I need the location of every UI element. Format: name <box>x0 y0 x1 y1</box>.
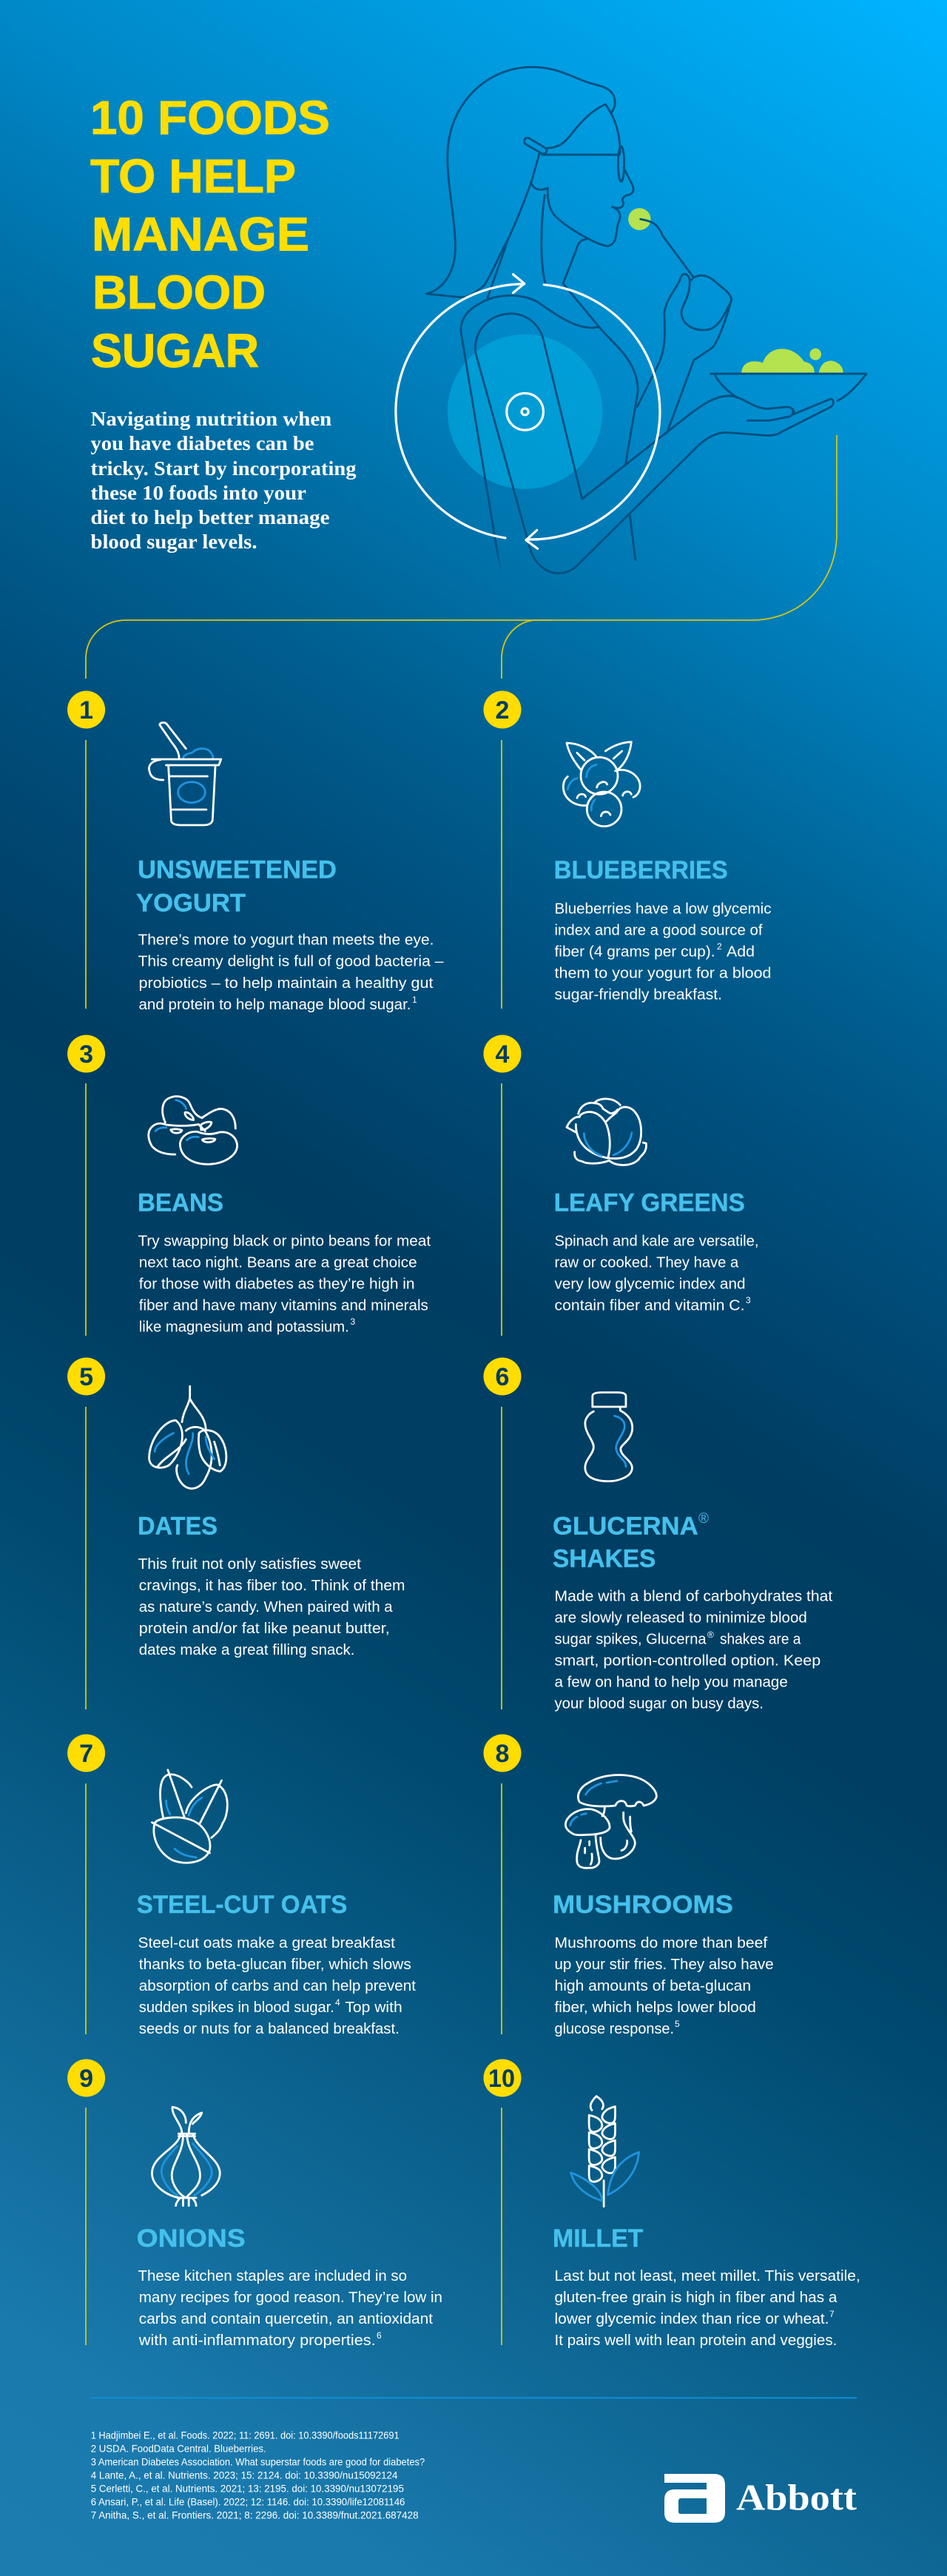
body text: glucerna shakes: smart, portion-controlled option. Keep <box>555 1652 820 1669</box>
body text: onions: These kitchen staples are included in so <box>138 2268 407 2284</box>
body text: onions <box>138 2268 442 2349</box>
number badge 2 <box>484 691 521 728</box>
title: SUGAR <box>91 324 259 377</box>
body text: blueberries: Blueberries have a low glycemic <box>555 901 771 917</box>
body text: leafy greens <box>555 1233 759 1314</box>
body text: yogurt <box>138 932 444 1013</box>
number badge 4 <box>484 1035 521 1073</box>
number badge 5: 5 <box>79 1363 93 1391</box>
panel: mushrooms <box>484 1735 774 2037</box>
body text: dates: This fruit not only satisfies sweet <box>138 1556 361 1573</box>
references: 3 American Diabetes Association. What superstar foods are good for diabetes? <box>91 2455 425 2467</box>
body text: leafy greens: raw or cooked. They have a <box>555 1254 739 1271</box>
number badge 5 <box>67 1357 105 1396</box>
panel: unsweetened yogurt <box>67 691 444 1013</box>
heading: blueberries: BLUEBERRIES <box>554 856 728 884</box>
icon: millet <box>571 2096 639 2207</box>
references: 4 Lante, A., et al. Nutrients. 2023; 15: 2124. doi: 10.3390/nu15092124 <box>91 2469 398 2481</box>
body text: millet: 7 <box>829 2309 835 2319</box>
number badge 3: 3 <box>79 1040 93 1069</box>
body text: glucerna shakes <box>555 1588 833 1712</box>
body text: leafy greens: 3 <box>746 1295 751 1305</box>
heading: glucerna shakes <box>553 1511 709 1573</box>
heading: millet: MILLET <box>553 2224 644 2253</box>
references <box>91 2429 425 2520</box>
body text: millet: Last but not least, meet millet. This versatile, <box>555 2268 860 2284</box>
body text: glucerna shakes: Made with a blend of carbohydrates that <box>555 1588 833 1604</box>
icon: cabbage <box>567 1099 647 1165</box>
heading: glucerna shakes: GLUCERNA <box>553 1512 698 1540</box>
body text: mushrooms: up your stir fries. They also have <box>555 1957 774 1973</box>
number badge 2: 2 <box>496 696 509 724</box>
body text: glucerna shakes: your blood sugar on busy days. <box>555 1695 764 1712</box>
body text: yogurt: probiotics – to help maintain a healthy gut <box>139 975 434 992</box>
number badge 7: 7 <box>79 1740 93 1768</box>
number badge 3 <box>67 1035 105 1073</box>
references: 2 USDA. FoodData Central. Blueberries. <box>91 2442 266 2454</box>
heading: steel-cut oats: STEEL-CUT OATS <box>137 1891 347 1919</box>
title: 10 FOODS <box>90 91 330 144</box>
icon: beans <box>149 1097 237 1164</box>
blood sugar cycle arrows and target <box>396 275 660 548</box>
body text: yogurt: There’s more to yogurt than meets the eye. <box>138 932 434 949</box>
intro text: diet to help better manage <box>90 506 330 528</box>
number badge 8 <box>484 1735 521 1772</box>
body text: mushrooms: Mushrooms do more than beef <box>555 1935 768 1951</box>
title <box>90 91 330 377</box>
body text: beans: 3 <box>351 1316 355 1327</box>
body text: onions: carbs and contain quercetin, an antioxidant <box>139 2311 433 2327</box>
panel: leafy greens <box>484 1035 759 1314</box>
body text: oats: Steel-cut oats make a great breakfast <box>138 1935 395 1951</box>
number badge 1: 1 <box>79 696 93 724</box>
body text: leafy greens: very low glycemic index and <box>555 1276 746 1292</box>
body text: glucerna shakes: are slowly released to minimize blood <box>555 1610 807 1626</box>
body text: dates: as nature’s candy. When paired with a <box>139 1599 393 1615</box>
references: 5 Cerletti, C., et al. Nutrients. 2021; 13: 2195. doi: 10.3390/nu13072195 <box>91 2482 404 2494</box>
body text: mushrooms: 5 <box>675 2019 680 2029</box>
body text: beans: like magnesium and potassium. <box>139 1319 349 1335</box>
body text: glucerna shakes: ® <box>707 1630 714 1640</box>
woman line drawing <box>426 67 833 574</box>
food on fork <box>628 208 693 277</box>
title: TO HELP <box>90 149 296 203</box>
body text: blueberries: Add <box>727 944 755 960</box>
icon: onion <box>152 2107 220 2206</box>
intro text: blood sugar levels. <box>90 531 257 553</box>
body text: blueberries: fiber (4 grams per cup). <box>555 944 715 960</box>
number badge 10: 10 <box>488 2065 515 2093</box>
panel: steel-cut oats <box>67 1735 416 2037</box>
body text: onions: many recipes for good reason. They’re low in <box>139 2290 442 2306</box>
bowl of greens <box>711 349 866 400</box>
body text: dates: dates make a great filling snack. <box>139 1642 354 1658</box>
body text: dates <box>138 1556 405 1658</box>
heading: leafy greens: LEAFY GREENS <box>554 1189 745 1217</box>
body text: blueberries: 2 <box>717 941 722 952</box>
heading: glucerna shakes: SHAKES <box>553 1545 656 1573</box>
body text: mushrooms <box>555 1935 774 2037</box>
body text: mushrooms: fiber, which helps lower blood <box>555 2000 756 2016</box>
body text: blueberries: index and are a good source of <box>555 922 763 938</box>
body text: oats: Top with <box>345 2000 402 2016</box>
heading: unsweetened yogurt: YOGURT <box>136 890 246 918</box>
body text: oats: 4 <box>335 1997 340 2008</box>
panel: glucerna shakes <box>484 1357 833 1712</box>
panel: millet <box>484 2059 860 2349</box>
body text: oats: thanks to beta-glucan fiber, which slows <box>139 1957 411 1973</box>
number badge 1 <box>67 691 105 728</box>
icon: shake bottle <box>585 1393 633 1482</box>
icon: blueberries <box>563 742 640 827</box>
body text: millet: It pairs well with lean protein and veggies. <box>555 2333 837 2349</box>
body text: onions: with anti-inflammatory properties. <box>138 2333 376 2349</box>
illustration: woman eating with blood sugar cycle <box>396 67 866 574</box>
icon: yogurt cup <box>149 723 221 825</box>
body text: oats: sudden spikes in blood sugar. <box>139 2000 334 2016</box>
body text: blueberries: sugar-friendly breakfast. <box>555 986 722 1003</box>
body text: beans: Try swapping black or pinto beans for meat <box>138 1233 431 1249</box>
number badge 7 <box>67 1735 105 1772</box>
body text: glucerna shakes: sugar spikes, Glucerna <box>555 1631 707 1647</box>
body text: beans: for those with diabetes as they’re high in <box>139 1276 415 1292</box>
body text: leafy greens: contain fiber and vitamin C. <box>555 1297 744 1314</box>
body text: blueberries <box>555 901 771 1003</box>
body text: yogurt: 1 <box>412 995 417 1005</box>
panel: blueberries <box>484 691 771 1003</box>
heading: unsweetened yogurt: UNSWEETENED <box>138 856 337 884</box>
body text: oats: seeds or nuts for a balanced breakfast. <box>139 2021 400 2037</box>
icon: mushrooms <box>565 1775 656 1868</box>
body text: beans: next taco night. Beans are a great choice <box>139 1254 417 1271</box>
body text: glucerna shakes: a few on hand to help you manage <box>555 1674 788 1690</box>
number badge 9: 9 <box>79 2065 93 2093</box>
body text: oats <box>138 1935 416 2037</box>
glow behind target <box>448 334 602 489</box>
heading: glucerna shakes: ® <box>698 1511 709 1527</box>
Abbott logo: Abbott <box>736 2477 857 2518</box>
body text: onions: 6 <box>377 2330 382 2341</box>
body text: mushrooms: glucose response. <box>555 2021 674 2037</box>
heading: unsweetened yogurt <box>136 856 337 918</box>
intro text <box>90 408 357 553</box>
number badge 8: 8 <box>496 1740 509 1768</box>
icon: dates <box>149 1386 226 1488</box>
heading: onions: ONIONS <box>137 2224 246 2253</box>
number badge 6 <box>484 1357 521 1396</box>
number badge 4: 4 <box>496 1040 510 1069</box>
intro text: these 10 foods into your <box>90 482 306 504</box>
references: 6 Ansari, P., et al. Life (Basel). 2022; 12: 1146. doi: 10.3390/life12081146 <box>91 2495 405 2507</box>
intro text: tricky. Start by incorporating <box>90 457 357 480</box>
body text: beans: fiber and have many vitamins and minerals <box>139 1297 428 1314</box>
title: MANAGE <box>92 207 309 260</box>
number badge 10 <box>484 2059 521 2097</box>
body text: millet: gluten-free grain is high in fiber and has a <box>555 2290 838 2306</box>
intro text: Navigating nutrition when <box>90 408 331 430</box>
body text: oats: absorption of carbs and can help prevent <box>139 1978 416 1994</box>
body text: blueberries: them to your yogurt for a blood <box>555 965 771 981</box>
body text: dates: cravings, it has fiber too. Think of them <box>139 1578 405 1594</box>
body text: millet: lower glycemic index than rice or wheat. <box>555 2311 829 2327</box>
heading: dates: DATES <box>138 1512 218 1540</box>
references: 1 Hadjimbei E., et al. Foods. 2022; 11: 2691. doi: 10.3390/foods11172691 <box>91 2429 400 2441</box>
panel: dates <box>67 1357 405 1658</box>
heading: mushrooms: MUSHROOMS <box>553 1891 733 1919</box>
intro text: you have diabetes can be <box>90 432 314 454</box>
body text: leafy greens: Spinach and kale are versatile, <box>555 1233 759 1249</box>
number badge 9 <box>67 2059 105 2097</box>
panel: beans <box>67 1035 431 1335</box>
body text: beans <box>138 1233 431 1335</box>
heading: beans: BEANS <box>138 1189 223 1217</box>
panel: onions <box>67 2059 442 2349</box>
number badge 6: 6 <box>496 1363 509 1391</box>
body text: glucerna shakes: shakes are a <box>720 1631 801 1647</box>
body text: millet <box>555 2268 860 2349</box>
body text: mushrooms: high amounts of beta-glucan <box>555 1978 751 1994</box>
references: 7 Anitha, S., et al. Frontiers. 2021; 8: 2296. doi: 10.3389/fnut.2021.687428 <box>91 2509 419 2520</box>
Abbott logo <box>664 2474 857 2523</box>
icon: oats <box>152 1770 227 1863</box>
body text: yogurt: and protein to help manage blood sugar. <box>139 997 411 1013</box>
body text: yogurt: This creamy delight is full of good bacteria – <box>138 954 444 970</box>
title: BLOOD <box>92 266 266 319</box>
body text: dates: protein and/or fat like peanut butter, <box>139 1621 390 1637</box>
